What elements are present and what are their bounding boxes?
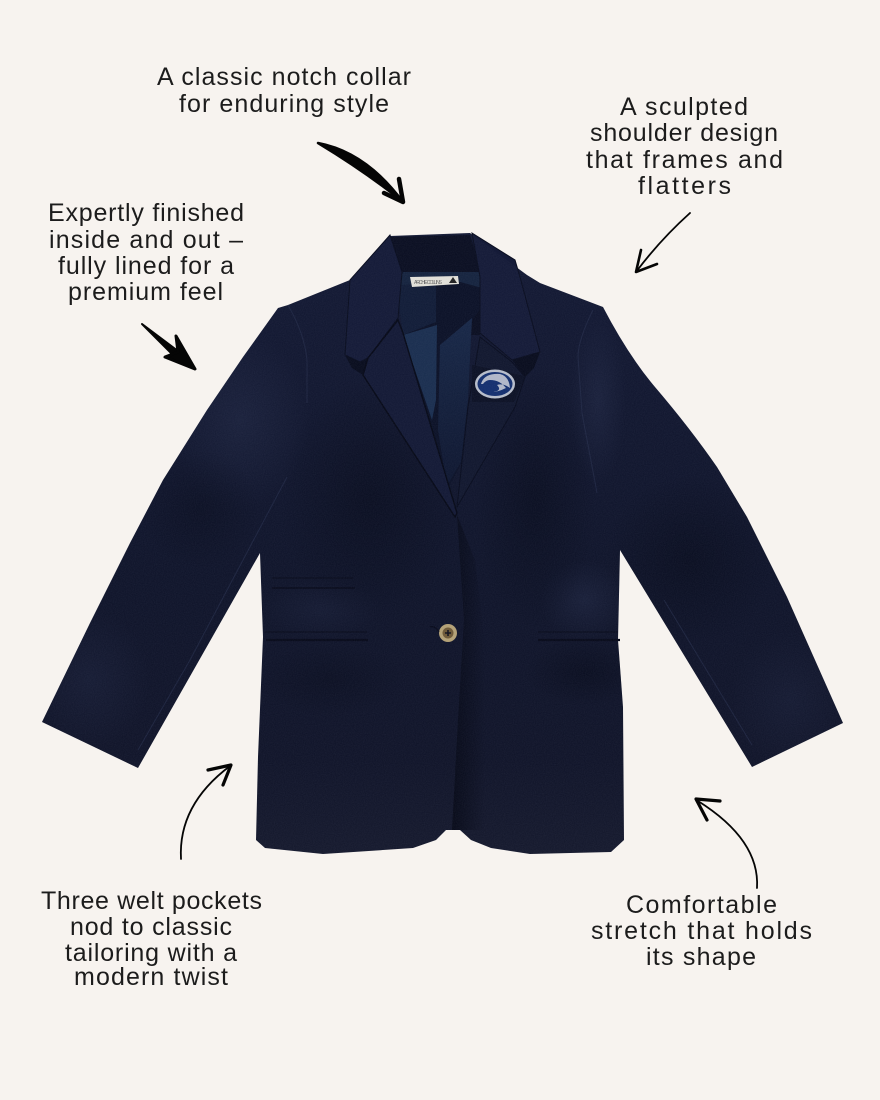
- right welt pocket: [538, 632, 620, 640]
- callout: sculpted shoulder: shoulder design: [590, 119, 778, 147]
- jacket lining: [395, 272, 482, 490]
- arrow: to stretch fabric: [696, 799, 757, 888]
- callout: notch collar: for enduring style: [179, 90, 389, 118]
- lower left welt pocket: [265, 632, 368, 640]
- arrow: to pockets: [181, 765, 231, 859]
- fabric texture: [40, 230, 845, 855]
- blazer illustration: [30, 230, 850, 855]
- callout: notch collar: [157, 63, 411, 118]
- callout: sculpted shoulder: [586, 93, 783, 200]
- badge: lion logo: [472, 365, 525, 402]
- upper left welt pocket: [272, 578, 355, 588]
- callout: fully lined: Expertly finished: [48, 199, 244, 227]
- left collar: [345, 235, 402, 362]
- right collar: [472, 233, 540, 360]
- inner collar: [390, 235, 482, 335]
- callout: fully lined: premium feel: [68, 278, 223, 306]
- infographic canvas: [42, 67, 843, 985]
- callout: notch collar: A classic notch collar: [157, 63, 411, 91]
- callout: fully lined: [48, 199, 244, 306]
- arrow: to collar: [318, 143, 403, 202]
- callout: comfortable stretch: its shape: [646, 943, 756, 971]
- seams: [138, 305, 752, 750]
- callout: welt pockets: nod to classic: [70, 913, 232, 941]
- arrow: to lining side: [142, 324, 195, 369]
- callout: comfortable stretch: stretch that holds: [591, 917, 812, 945]
- button: [430, 624, 457, 642]
- blazer silhouette: [42, 233, 843, 854]
- callout: welt pockets: [41, 887, 262, 991]
- callout: comfortable stretch: [591, 891, 812, 971]
- callout: welt pockets: Three welt pockets: [41, 887, 262, 915]
- fabric shading: [30, 315, 850, 830]
- callout: welt pockets: tailoring with a: [65, 939, 237, 967]
- callout: comfortable stretch: Comfortable: [626, 891, 777, 919]
- callout: fully lined: inside and out –: [49, 226, 243, 254]
- neck label: ARCHIE COLLINS: [414, 280, 443, 286]
- arrow: to shoulder: [636, 213, 690, 272]
- left lapel: [363, 320, 457, 517]
- callout: fully lined: fully lined for a: [58, 252, 234, 280]
- right lapel: [457, 337, 525, 507]
- neck label: [410, 276, 459, 287]
- callout: sculpted shoulder: A sculpted: [620, 93, 748, 121]
- callout: welt pockets: modern twist: [74, 963, 228, 991]
- callout: sculpted shoulder: that frames and: [586, 146, 783, 174]
- lining highlights: [396, 272, 482, 486]
- callout: sculpted shoulder: flatters: [638, 172, 731, 200]
- lapel shadows: [345, 352, 540, 377]
